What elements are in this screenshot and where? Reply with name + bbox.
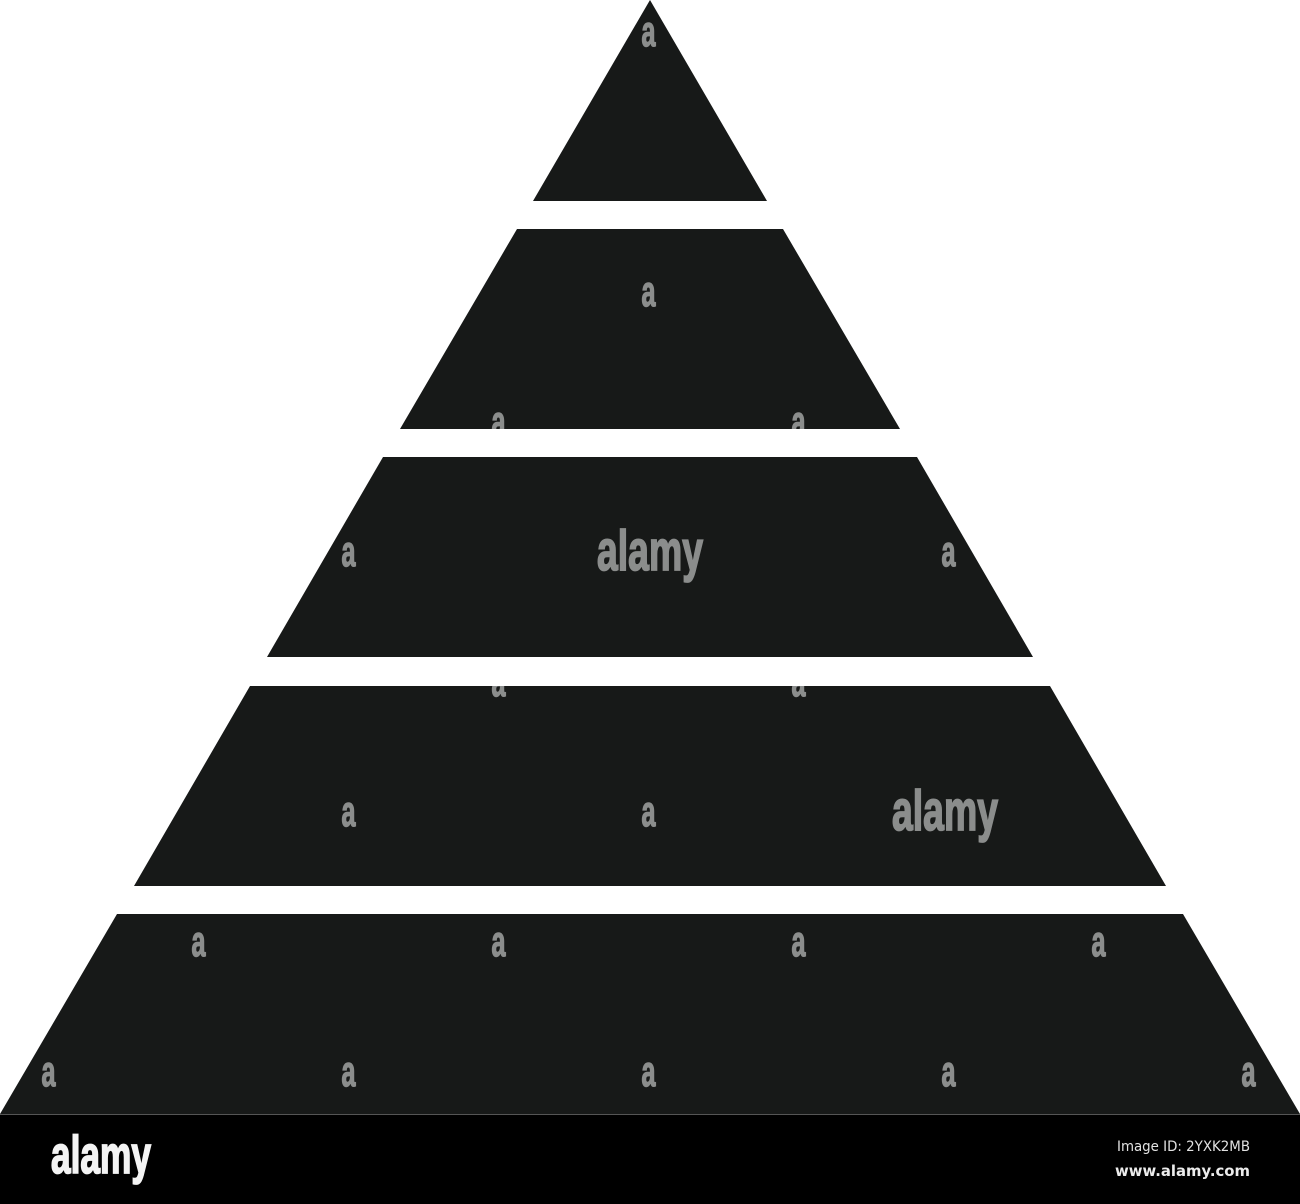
watermark marks: a — [642, 8, 656, 56]
tier 2 — [400, 229, 900, 429]
watermark marks: a — [642, 788, 656, 836]
watermark marks: a — [792, 918, 806, 966]
watermark marks: a — [792, 658, 806, 706]
watermark marks: a — [942, 528, 956, 576]
tier 5: base — [0, 914, 1300, 1114]
website: www.alamy.com — [1115, 1162, 1250, 1180]
tier 1: apex triangle — [533, 0, 767, 201]
watermark marks: a — [492, 918, 506, 966]
watermark marks: a — [492, 658, 506, 706]
watermark marks: a — [192, 918, 206, 966]
watermark marks: a — [342, 528, 356, 576]
watermark marks: a — [642, 268, 656, 316]
tier 3 — [267, 457, 1033, 657]
watermark marks: a — [342, 1048, 356, 1096]
watermark marks: a — [342, 788, 356, 836]
watermark marks: a — [792, 398, 806, 446]
footer logo: alamy — [51, 1126, 151, 1185]
watermark marks: a — [492, 398, 506, 446]
image id: Image ID: 2YXK2MB — [1117, 1139, 1250, 1155]
watermark marks: alamy — [597, 519, 703, 583]
footer bar — [0, 1114, 1300, 1204]
watermark marks: alamy — [892, 779, 998, 843]
watermark marks: a — [642, 1048, 656, 1096]
watermark marks: a — [42, 1048, 56, 1096]
watermark marks: a — [1242, 1048, 1256, 1096]
watermark marks: a — [942, 1048, 956, 1096]
watermark marks: a — [1092, 918, 1106, 966]
tier 4 — [134, 686, 1166, 886]
